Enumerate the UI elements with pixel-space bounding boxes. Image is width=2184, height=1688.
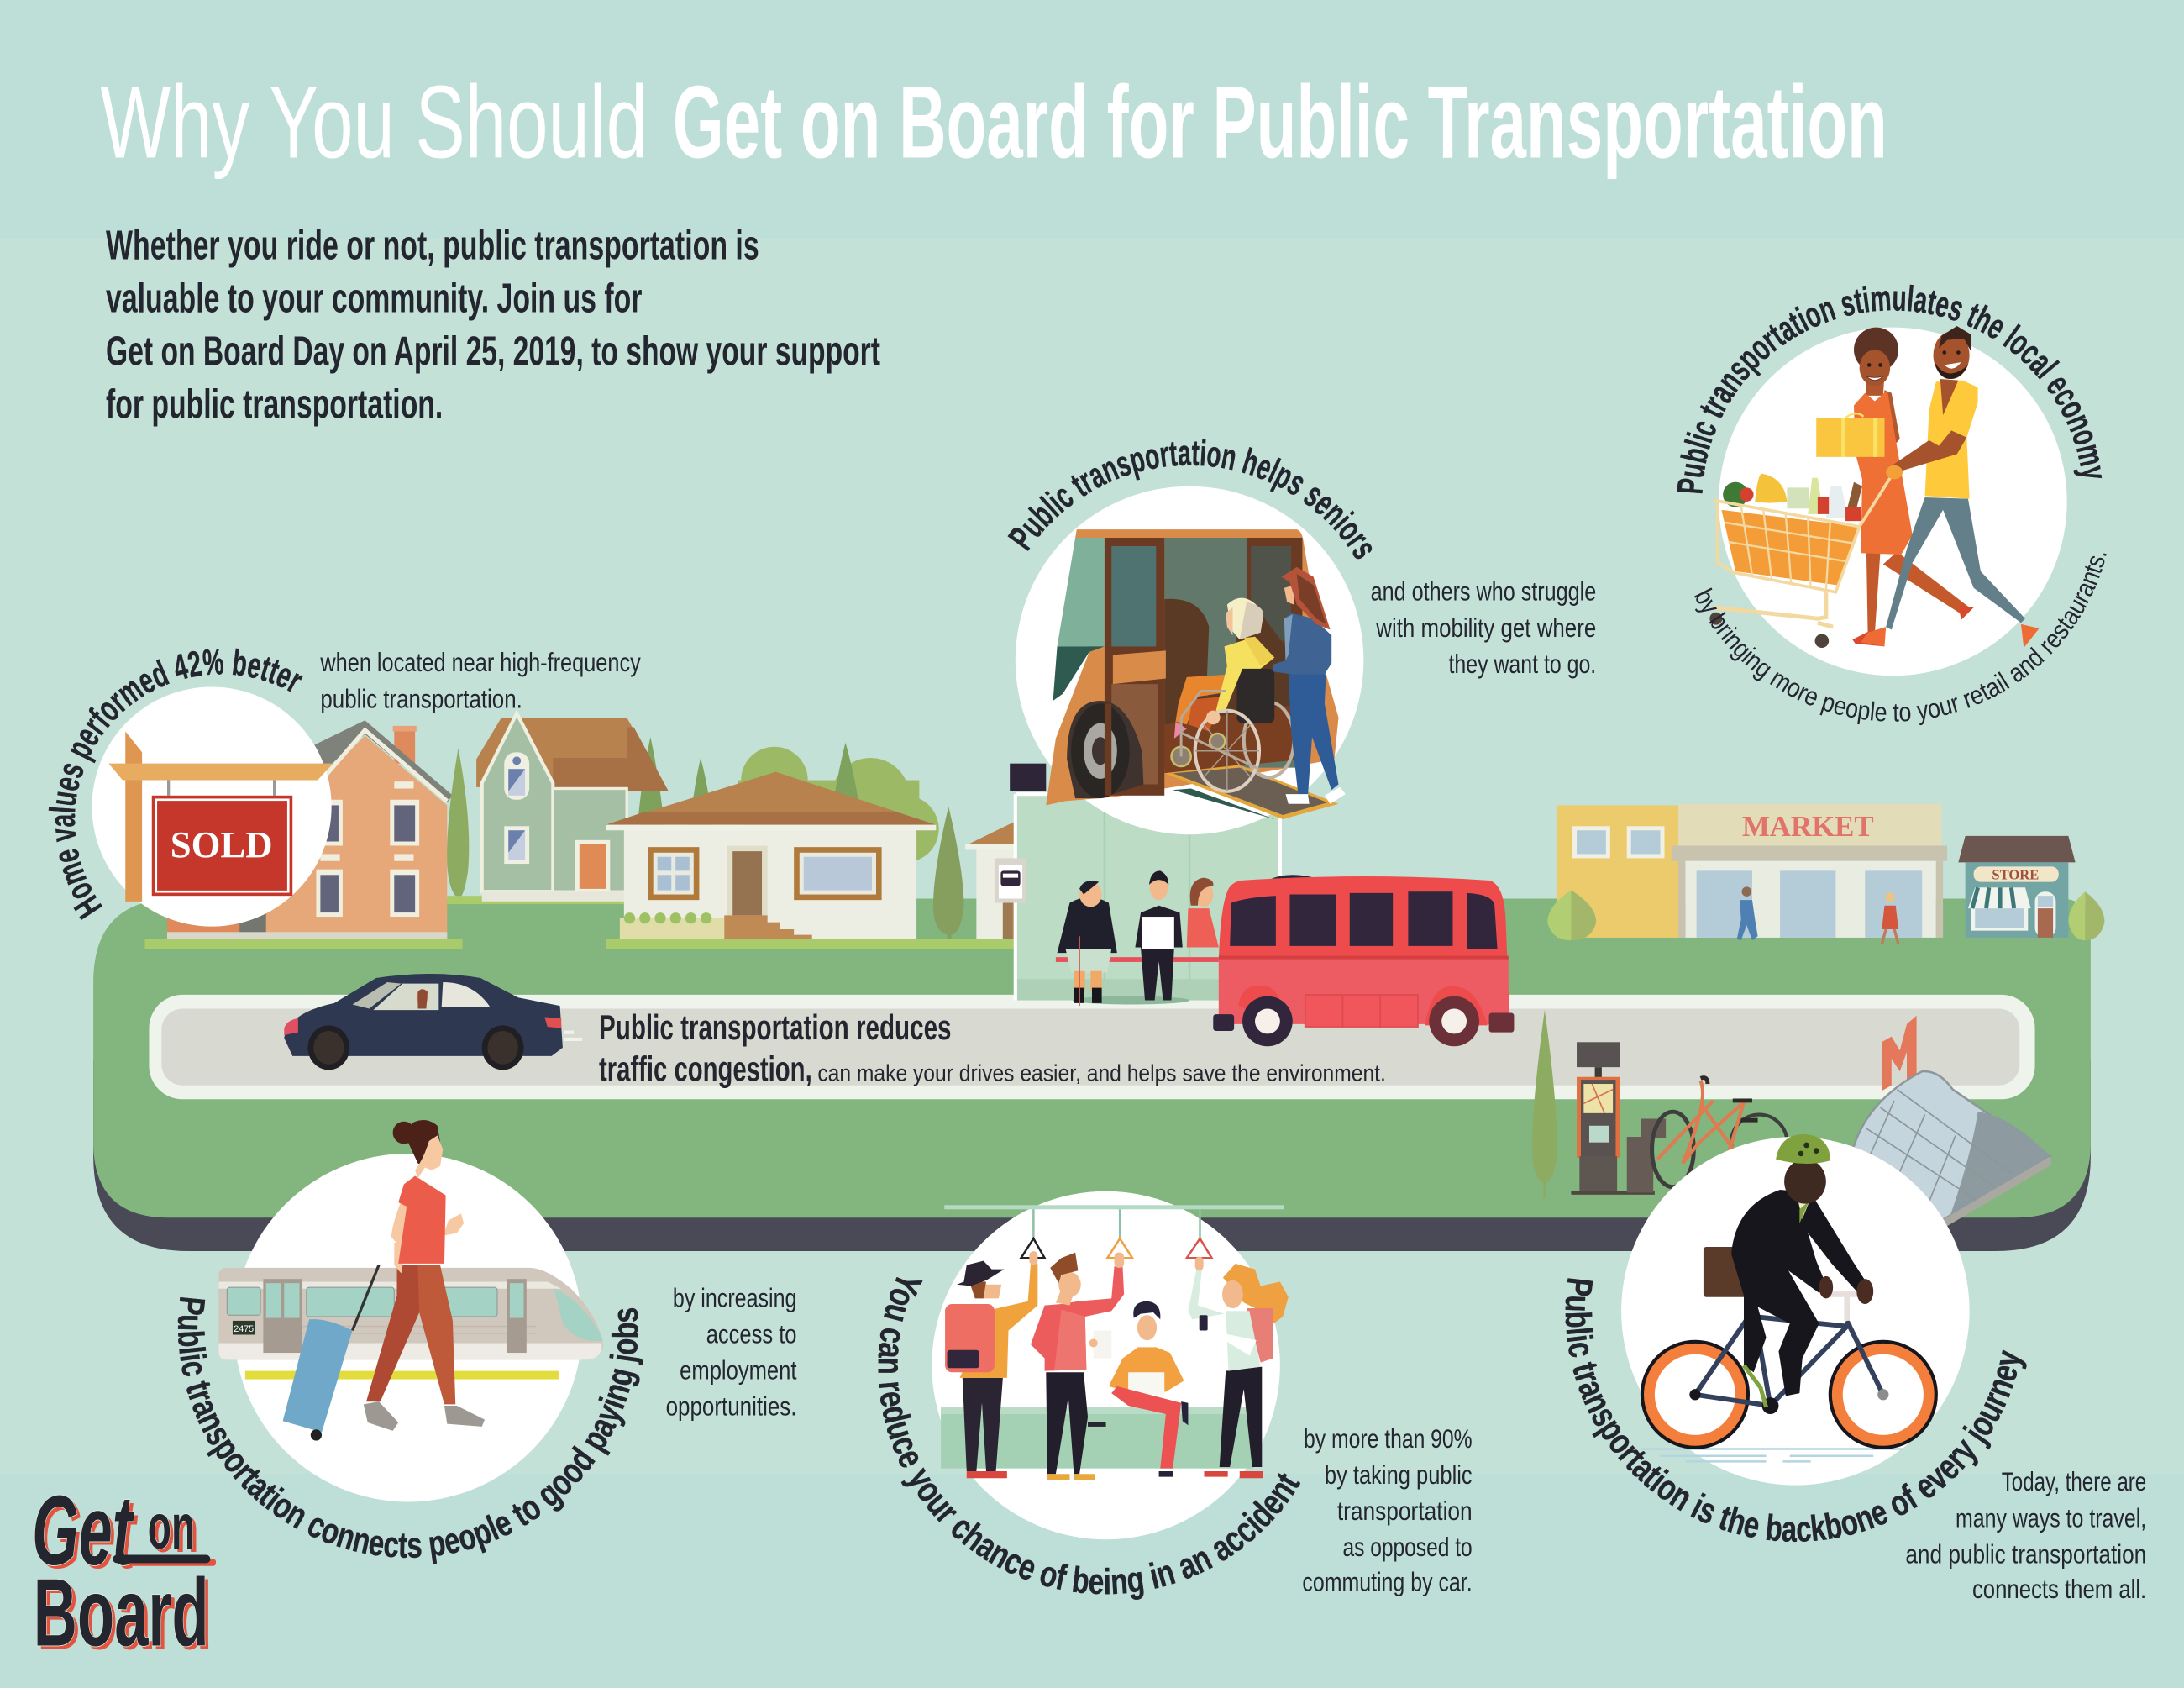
caption [1371, 576, 1596, 679]
intro text block: Whether you ride or not, public transportation is [106, 223, 759, 268]
bushes by shops [1547, 891, 2104, 940]
road text: traffic congestion: traffic congestion, [599, 1049, 812, 1089]
logo: Get on Board: on [151, 1495, 198, 1566]
pedestrians [1737, 886, 1898, 944]
title: Why You Should [100, 65, 648, 180]
caption: when located near high-frequency [320, 647, 641, 677]
curved heading: Public transportation connects people to good paying jobs [178, 1297, 643, 1564]
panel: local economy [1677, 284, 2107, 726]
panel: good paying jobs [178, 1120, 797, 1564]
curved heading: Public transportation is the backbone of every journey [1565, 1278, 2027, 1543]
logo: Get on Board: Board [34, 1559, 209, 1666]
caption: public transportation. [320, 683, 522, 713]
platform line [245, 1371, 559, 1380]
white circle [234, 1154, 582, 1501]
ramp [1164, 765, 1338, 819]
ground platform [93, 898, 2091, 1251]
road [149, 995, 2035, 1099]
man pushing cart [1861, 326, 2040, 648]
white circle [1016, 486, 1363, 834]
white circle [1719, 328, 2067, 676]
commuter with phone [1188, 1257, 1289, 1478]
road text: traffic congestion: can make your drives easier, and helps save the environment. [817, 1060, 1386, 1086]
caption: opportunities. [666, 1391, 796, 1422]
train [218, 1268, 603, 1359]
red bus [1213, 875, 1514, 1046]
walking woman [364, 1120, 485, 1431]
cypress tree [447, 748, 469, 898]
logo: Get on Board: Get [35, 1478, 139, 1589]
man with newspaper [1135, 870, 1183, 1001]
SOLD sign [108, 732, 333, 902]
intro text block [106, 223, 880, 427]
curved heading: Public transportation stimulates the local economy [1677, 284, 2102, 494]
market shops: MARKET [1742, 810, 1874, 843]
logo: Get on Board: on [148, 1491, 195, 1563]
standing helper [1273, 567, 1346, 804]
overhead bar and straps [944, 1205, 1284, 1258]
car [284, 974, 582, 1070]
logo: Get on Board: Get [32, 1475, 134, 1585]
commuter in red sweater [1031, 1253, 1124, 1480]
elderly passenger [1058, 881, 1117, 1006]
train seat [941, 1407, 1253, 1469]
caption [320, 647, 641, 713]
bus stop sign [995, 858, 1026, 939]
caption: they want to go. [1448, 649, 1596, 679]
woman with gift box [1816, 328, 1974, 646]
caption: transportation [1337, 1496, 1473, 1526]
white bungalow [606, 772, 1016, 949]
seated commuter [1109, 1301, 1188, 1477]
intro text block: for public transportation. [106, 381, 443, 427]
white circle [932, 1191, 1280, 1539]
bus stop shelter [1010, 764, 1280, 1001]
caption: and others who struggle [1371, 576, 1596, 607]
logo: Get on Board [32, 1475, 216, 1670]
logo: Get on Board: Board [37, 1562, 213, 1670]
wheelchair passenger [1172, 598, 1294, 791]
ticket kiosk [1571, 1042, 1655, 1195]
curved heading: Home values performed 42% better [49, 649, 303, 920]
road text: traffic congestion: Public transportation reduces [599, 1007, 952, 1047]
white circle [1621, 1137, 1970, 1486]
tall tree [933, 807, 963, 939]
caption: as opposed to [1342, 1532, 1473, 1562]
market shops: STORE [1992, 866, 2039, 882]
white circle [92, 686, 332, 927]
market shops [1557, 804, 2076, 938]
waiting passengers [1056, 870, 1219, 1006]
title [100, 65, 1887, 180]
caption: with mobility get where [1375, 613, 1596, 643]
roadside tree [1532, 1010, 1557, 1198]
trees and bushes behind houses [633, 737, 939, 902]
caption: by increasing [673, 1282, 796, 1312]
intro text block: valuable to your community. Join us for [106, 276, 642, 321]
road text: traffic congestion [599, 1007, 1386, 1089]
panel: every journey [1565, 1134, 2146, 1604]
caption: by more than 90% [1304, 1423, 1473, 1454]
panel: home values [49, 647, 641, 927]
accessible bus [1046, 529, 1338, 805]
caption: employment [680, 1355, 797, 1386]
SOLD sign: SOLD [171, 823, 273, 865]
train: 2475 [234, 1324, 254, 1334]
intro text block: Get on Board Day on April 25, 2019, to show your support [106, 329, 880, 374]
small house by bus stop [965, 822, 1016, 939]
caption: connects them all. [1972, 1574, 2146, 1604]
green house [447, 713, 669, 904]
curved heading: Public transportation helps seniors [1008, 439, 1373, 560]
caption [1905, 1466, 2146, 1604]
caption: access to [706, 1318, 796, 1349]
panel: seniors [1008, 439, 1596, 835]
suitcase [283, 1265, 379, 1441]
commuter with backpack [945, 1251, 1037, 1478]
brick house [144, 720, 463, 949]
caption: commuting by car. [1302, 1567, 1473, 1597]
caption [666, 1282, 797, 1422]
caption: by taking public [1325, 1459, 1473, 1490]
curved caption: by bringing more people to your retail and restaurants. [1694, 553, 2107, 726]
bike rack [1627, 1078, 1787, 1192]
seated woman [1187, 878, 1219, 948]
curved heading: You can reduce your chance of being in an accident [878, 1277, 1300, 1600]
caption [1302, 1423, 1473, 1597]
metro entrance [1852, 1016, 2051, 1226]
panel: accident [878, 1191, 1473, 1600]
cyclist [1641, 1134, 1936, 1461]
shopping cart with groceries [1709, 465, 1903, 648]
